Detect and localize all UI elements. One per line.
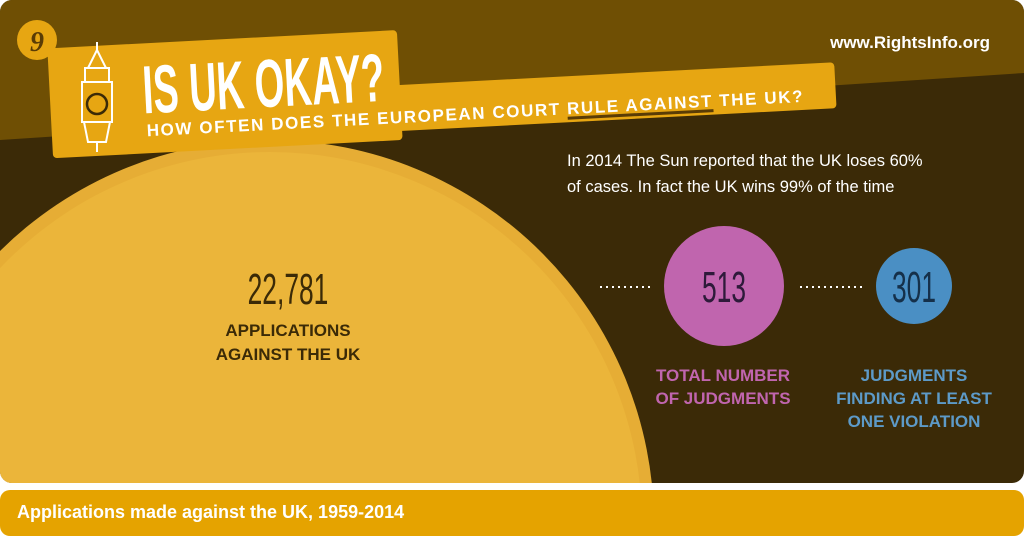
subtitle: HOW OFTEN DOES THE EUROPEAN COURT RULE AGAINST THE UK? [146,87,804,140]
label: violations: JUDGMENTS [861,366,967,385]
label: total judgments: TOTAL NUMBER [656,366,790,385]
dotted connector [800,286,862,288]
icon: big ben [82,42,112,152]
bottom caption bar: Applications made against the UK, 1959-2014 [17,502,404,522]
label: total judgments: OF JUDGMENTS [655,389,791,408]
intro text [567,152,923,196]
bottom caption bar [0,490,1024,536]
applications stat: 22,781 [248,264,328,314]
circle: violations 301: 301 [892,262,936,312]
label: total judgments [655,366,791,408]
icon: number badge 9 [17,20,57,60]
dotted connector [600,286,650,288]
icon: number badge 9: 9 [30,27,44,58]
title: IS UK OKAY? [141,39,386,128]
intro text: In 2014 The Sun reported that the UK loses 60% [567,152,923,170]
yellow circle: applications [0,144,652,483]
website url: www.RightsInfo.org [829,33,990,52]
circle: total judgments 513: 513 [702,262,746,312]
label: violations [836,366,993,431]
circle: violations 301 [876,248,952,324]
label: violations: ONE VIOLATION [848,412,980,431]
applications stat [216,264,361,364]
intro text: of cases. In fact the UK wins 99% of the time [567,178,894,196]
label: violations: FINDING AT LEAST [836,389,993,408]
applications stat: AGAINST THE UK [216,345,361,364]
circle: total judgments 513 [664,226,784,346]
applications stat: APPLICATIONS [225,321,351,340]
banner [47,7,837,158]
